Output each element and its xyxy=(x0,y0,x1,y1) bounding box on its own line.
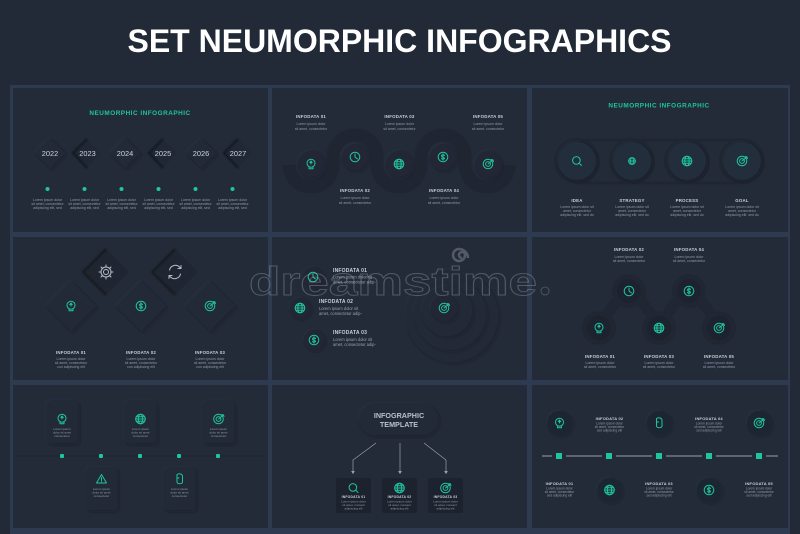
zigzag labels: Lorem ipsum dolor xyxy=(645,361,674,365)
wave labels: sit amet, consectetur xyxy=(383,127,416,131)
timeline captions: sit amet, consectetur xyxy=(216,202,249,206)
card text: dolor sit amet xyxy=(53,430,71,434)
card text: consectetur xyxy=(172,494,187,498)
zigzag labels: Lorem ipsum dolor xyxy=(675,255,704,259)
card text: Lorem ipsum xyxy=(93,487,111,491)
wave band xyxy=(289,135,509,187)
wave labels: sit amet, consectetur xyxy=(295,127,328,131)
panel: zigzag nodes xyxy=(582,247,736,369)
recessed cards: Lorem ipsum dolor xyxy=(387,500,412,504)
chain track xyxy=(577,140,742,183)
list labels: Lorem ipsum dolor sit xyxy=(333,274,373,280)
chain labels: adipiscing elit, sed do xyxy=(615,213,649,217)
chain labels: amet, consectetur xyxy=(673,209,702,213)
list labels: INFODATA 03 xyxy=(333,330,367,336)
recessed cards: sit amet, consect xyxy=(388,503,411,507)
chain labels: Lorem ipsum dolor sit xyxy=(560,205,594,209)
diamond labels: Lorem ipsum dolor xyxy=(127,357,156,361)
cards xyxy=(47,401,234,510)
timeline captions: adipiscing elit, sed xyxy=(107,206,136,210)
panel: wave process xyxy=(289,114,509,205)
list labels: INFODATA 02 xyxy=(319,299,353,305)
year diamonds: 2023 xyxy=(79,149,96,158)
diamond labels: cun adipiscing elit xyxy=(57,365,85,369)
zigzag labels: sit amet, consectetur xyxy=(673,259,706,263)
diamond labels: sit amet, consectetur xyxy=(194,361,227,365)
zigzag labels: Lorem ipsum dolor xyxy=(586,361,615,365)
card text: dolor sit amet xyxy=(131,430,150,434)
track xyxy=(542,455,778,457)
timeline captions: sit amet, consectetur xyxy=(68,202,101,206)
milestone labels: sit amet, consectetur xyxy=(644,490,675,494)
wave nodes xyxy=(298,144,501,177)
panel: concentric target xyxy=(290,267,498,362)
zigzag labels: INFODATA 01 xyxy=(585,354,615,359)
wave labels: Lorem ipsum dolor xyxy=(385,122,415,126)
chain labels: adipiscing elit, sed do xyxy=(725,213,759,217)
chain labels: amet, consectetur xyxy=(618,209,647,213)
card text: dolor sit amet xyxy=(170,490,189,494)
timeline captions: Lorem ipsum dolor xyxy=(181,198,211,202)
pill heading: TEMPLATE xyxy=(380,420,418,429)
timeline dots xyxy=(46,187,234,191)
card text: consectetur xyxy=(133,434,148,438)
chain labels xyxy=(560,198,759,217)
wave labels: sit amet, consectetur xyxy=(339,201,372,205)
milestone labels: sed adipiscing elit xyxy=(746,494,772,498)
year diamonds: 2025 xyxy=(155,149,171,158)
list labels: amet, consectetur adip- xyxy=(319,311,362,316)
card icons xyxy=(58,414,224,484)
recessed cards: sit amet, consect xyxy=(434,503,457,507)
list labels xyxy=(319,268,376,347)
panel: timeline 2022-2027 xyxy=(31,110,252,210)
recessed cards: Lorem ipsum dolor xyxy=(341,500,366,504)
year diamonds: 2024 xyxy=(117,149,133,158)
diamond labels: cun adipiscing elit xyxy=(127,365,155,369)
recessed cards: Lorem ipsum dolor xyxy=(433,500,458,504)
milestone labels: INFODATA 03 xyxy=(645,481,673,486)
card text: consectetur xyxy=(54,434,70,438)
timeline captions: Lorem ipsum dolor xyxy=(33,198,63,202)
wave labels: sit amet, consectetur xyxy=(428,201,461,205)
panel: card timeline xyxy=(17,401,264,510)
zigzag labels: Lorem ipsum dolor xyxy=(615,255,644,259)
milestone labels: Lorem ipsum dolor xyxy=(596,422,624,426)
zigzag labels: INFODATA 05 xyxy=(704,354,734,359)
diamond labels: cun adipiscing elit xyxy=(196,365,224,369)
diamond labels: sit amet, consectetur xyxy=(125,361,158,365)
milestone labels: sed adipiscing elit xyxy=(597,428,622,432)
timeline captions: Lorem ipsum dolor xyxy=(107,198,137,202)
small icon nodes xyxy=(290,267,324,350)
recessed cards: sit amet, consect xyxy=(342,503,365,507)
card text: Lorem ipsum xyxy=(53,427,71,431)
raised diamonds xyxy=(46,281,235,331)
wave labels: INFODATA 02 xyxy=(340,188,370,193)
chain labels: amet, consectetur xyxy=(728,209,757,213)
timeline captions: adipiscing elit, sed xyxy=(33,206,62,210)
wave labels: Lorem ipsum dolor xyxy=(341,196,370,200)
year diamonds: 2026 xyxy=(193,149,209,158)
recessed cards: INFODATA 01 xyxy=(342,495,365,499)
timeline captions: Lorem ipsum dolor xyxy=(70,198,100,202)
title: SET NEUMORPHIC INFOGRAPHICS xyxy=(127,23,672,59)
list labels: amet, consectetur adip- xyxy=(333,342,376,347)
square markers xyxy=(552,449,766,463)
diamond labels: Lorem ipsum dolor xyxy=(57,357,86,361)
watermark: dreamstime xyxy=(249,260,537,304)
milestone labels: INFODATA 04 xyxy=(695,416,723,421)
zigzag labels: Lorem ipsum dolor xyxy=(705,361,734,365)
zigzag labels: sit amet, consectetur xyxy=(584,365,617,369)
card text xyxy=(53,427,228,498)
recessed cards xyxy=(336,478,463,513)
wave labels: INFODATA 03 xyxy=(384,114,415,119)
zigzag labels: sit amet, consectetur xyxy=(643,365,676,369)
list labels: Lorem ipsum dolor sit xyxy=(333,337,373,342)
chain labels: adipiscing elit, sed do xyxy=(560,213,594,217)
timeline captions: adipiscing elit, sed xyxy=(218,206,247,210)
milestone labels: sed adipiscing elit xyxy=(547,494,572,498)
recessed cards: adipiscing elit xyxy=(436,506,455,510)
year diamonds: 2022 xyxy=(42,149,58,158)
milestone labels: Lorem ipsum dolor xyxy=(646,486,673,490)
circle icons xyxy=(548,411,771,502)
zigzag labels: INFODATA 03 xyxy=(644,354,674,359)
timeline captions: sit amet, consectetur xyxy=(105,202,138,206)
recessed cards: adipiscing elit xyxy=(390,506,409,510)
watermark xyxy=(249,249,549,304)
recessed cards: INFODATA 03 xyxy=(434,495,457,499)
zigzag band xyxy=(599,291,719,328)
card text: dolor sit amet xyxy=(209,430,228,434)
diamond labels xyxy=(55,350,227,369)
wave labels: Lorem ipsum dolor xyxy=(297,122,326,126)
diamond labels: INFODATA 01 xyxy=(56,350,86,355)
chain nodes xyxy=(554,138,765,184)
timeline captions: adipiscing elit, sed xyxy=(181,206,210,210)
milestone labels: sit amet, consectetur xyxy=(694,425,725,429)
milestone labels: sed adipiscing elit xyxy=(696,428,722,432)
zigzag labels xyxy=(584,247,736,369)
wave labels: INFODATA 05 xyxy=(473,114,503,119)
milestone labels: sed adipiscing elit xyxy=(646,494,672,498)
zigzag labels: sit amet, consectetur xyxy=(613,259,646,263)
chain labels: Lorem ipsum dolor sit xyxy=(725,205,759,209)
timeline captions: Lorem ipsum dolor xyxy=(218,198,248,202)
list labels: INFODATA 01 xyxy=(333,268,367,274)
wave labels: INFODATA 04 xyxy=(429,188,459,193)
year diamonds xyxy=(35,138,252,168)
recessed cards: adipiscing elit xyxy=(344,506,363,510)
milestone labels xyxy=(545,416,775,498)
list labels: amet, consectetur adip- xyxy=(333,280,376,284)
wave labels xyxy=(295,114,505,205)
milestone labels: INFODATA 01 xyxy=(546,481,574,486)
center line xyxy=(17,455,264,457)
panel: four step chain xyxy=(554,102,765,217)
card text: consectetur xyxy=(211,434,226,438)
milestone labels: Lorem ipsum dolor xyxy=(696,422,723,426)
panel: template tree xyxy=(336,404,463,513)
diamond labels: INFODATA 02 xyxy=(126,350,156,355)
chain labels: STRATEGY xyxy=(619,198,645,203)
year diamonds: 2027 xyxy=(230,149,246,158)
zigzag labels: INFODATA 04 xyxy=(674,247,704,252)
recessed cards: INFODATA 02 xyxy=(388,495,411,499)
milestone labels: sit amet, consectetur xyxy=(744,490,775,494)
card text: Lorem ipsum xyxy=(171,487,189,491)
card text: consectetur xyxy=(94,494,109,498)
panel: horizontal milestones xyxy=(542,411,778,502)
timeline captions xyxy=(31,198,249,210)
chain labels: PROCESS xyxy=(676,198,698,203)
arrows xyxy=(352,443,448,474)
heading: NEUMORPHIC INFOGRAPHIC xyxy=(89,110,191,117)
concentric circles xyxy=(406,270,498,362)
chain labels: amet, consectetur xyxy=(563,209,592,213)
timeline captions: sit amet, consectetur xyxy=(179,202,212,206)
list labels: Lorem ipsum dolor sit xyxy=(319,306,359,311)
wave labels: Lorem ipsum dolor xyxy=(430,196,459,200)
chain labels: GOAL xyxy=(735,198,749,203)
milestone labels: Lorem ipsum dolor xyxy=(746,486,773,490)
pill heading: INFOGRAPHIC xyxy=(374,411,424,420)
timeline captions: adipiscing elit, sed xyxy=(70,206,99,210)
wave labels: INFODATA 01 xyxy=(296,114,326,119)
milestone labels: sit amet, consectetur xyxy=(545,490,575,494)
timeline captions: Lorem ipsum dolor xyxy=(144,198,174,202)
timeline dots xyxy=(60,454,220,458)
diamond labels: Lorem ipsum dolor xyxy=(196,357,225,361)
card text: dolor sit amet xyxy=(92,490,111,494)
chain labels: adipiscing elit, sed do xyxy=(670,213,704,217)
wave labels: Lorem ipsum dolor xyxy=(474,122,503,126)
pill heading xyxy=(359,404,438,435)
chain labels: Lorem ipsum dolor sit xyxy=(615,205,649,209)
diamond labels: sit amet, consectetur xyxy=(55,361,88,365)
card text: Lorem ipsum xyxy=(132,427,150,431)
milestone labels: INFODATA 05 xyxy=(745,481,773,486)
zigzag nodes xyxy=(582,274,736,345)
recessed diamonds xyxy=(83,249,198,295)
timeline captions: sit amet, consectetur xyxy=(142,202,175,206)
heading: NEUMORPHIC INFOGRAPHIC xyxy=(608,102,710,110)
timeline captions: sit amet, consectetur xyxy=(31,202,64,206)
panel: diamonds xyxy=(46,249,235,369)
timeline captions: adipiscing elit, sed xyxy=(144,206,173,210)
zigzag labels: sit amet, consectetur xyxy=(703,365,736,369)
milestone labels: sit amet, consectetur xyxy=(595,425,625,429)
milestone labels: Lorem ipsum dolor xyxy=(546,486,574,490)
wave labels: sit amet, consectetur xyxy=(472,127,505,131)
chain labels: IDEA xyxy=(571,198,583,203)
zigzag labels: INFODATA 02 xyxy=(614,247,644,252)
diamond labels: INFODATA 03 xyxy=(195,350,225,355)
card text: Lorem ipsum xyxy=(210,427,228,431)
chain labels: Lorem ipsum dolor sit xyxy=(670,205,704,209)
milestone labels: INFODATA 02 xyxy=(596,416,624,421)
